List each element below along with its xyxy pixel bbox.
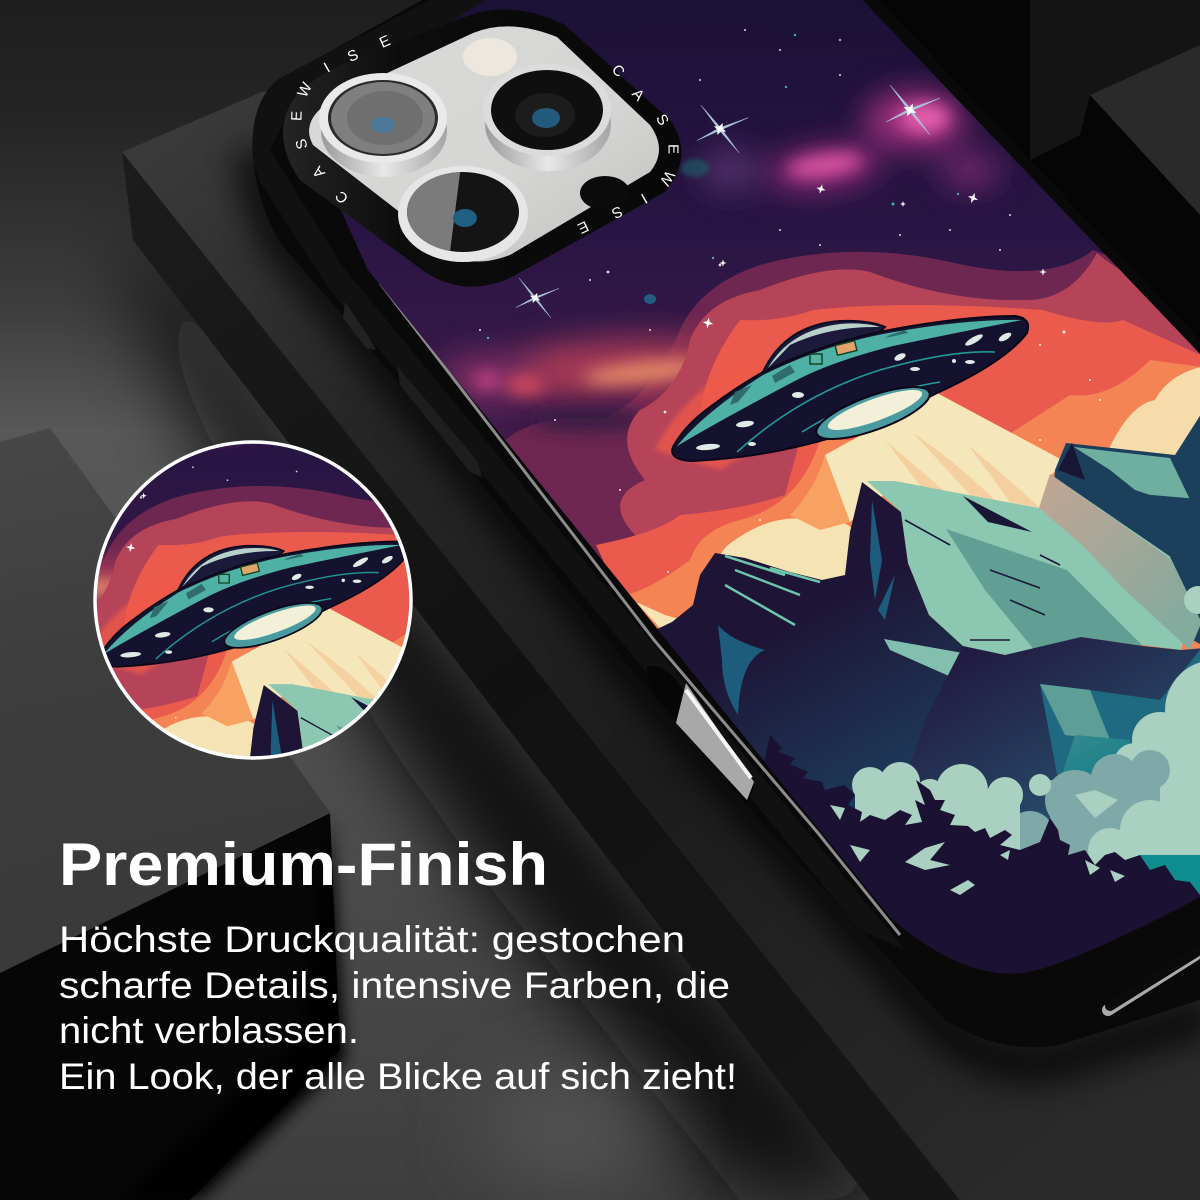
brand ring text: E xyxy=(288,111,306,121)
brand ring text: W xyxy=(294,79,316,100)
top right block top xyxy=(1090,45,1200,215)
lower left block top xyxy=(0,428,330,975)
lower left block dark front xyxy=(0,813,345,1200)
body text: scharfe Details, intensive Farben, die xyxy=(59,965,730,1006)
phone case body xyxy=(253,0,1200,1047)
microphone hole xyxy=(580,176,630,210)
brand ring text: E xyxy=(575,217,591,237)
heading: Premium-Finish xyxy=(59,831,548,898)
brand ring text: C xyxy=(608,61,628,81)
detail magnifier circle xyxy=(93,440,413,760)
lens top left xyxy=(319,73,447,177)
brand ring text: I xyxy=(638,190,650,206)
side button long xyxy=(398,367,482,477)
brand ring text: S xyxy=(609,202,625,222)
brand ring text: I xyxy=(321,60,333,76)
phone shadow on plinth xyxy=(253,150,1200,1064)
phone artwork xyxy=(340,0,1200,974)
top right black backdrop xyxy=(860,0,1200,360)
body text: Höchste Druckqualität: gestochen xyxy=(59,919,685,960)
body text: nicht verblassen. xyxy=(59,1010,359,1051)
brand ring text xyxy=(288,32,682,237)
brand ring text: E xyxy=(377,32,393,52)
side button small xyxy=(343,302,376,350)
glossy edge highlight xyxy=(380,283,900,935)
bottom port xyxy=(1108,951,1198,1010)
body text xyxy=(59,919,737,1097)
brand ring text: C xyxy=(332,187,352,207)
lens bottom xyxy=(398,165,528,262)
lens window xyxy=(309,26,659,261)
main plinth side face xyxy=(122,152,960,1200)
silver side button xyxy=(647,666,754,805)
brand ring text: S xyxy=(345,46,361,66)
case front rim xyxy=(252,0,905,950)
brand ring text: E xyxy=(664,144,682,154)
brand ring text: A xyxy=(628,86,648,104)
camera island xyxy=(283,9,682,287)
plinth shadow on floor xyxy=(135,230,900,1200)
brand ring text: W xyxy=(656,167,678,189)
brand ring text: S xyxy=(292,137,312,151)
lens top right xyxy=(483,64,611,171)
body text: Ein Look, der alle Blicke auf sich zieht! xyxy=(59,1056,737,1097)
floor glow xyxy=(480,1080,660,1180)
brand ring text: A xyxy=(309,163,329,181)
flash xyxy=(463,38,517,76)
top right panel xyxy=(1030,0,1200,160)
brand ring text: S xyxy=(652,111,672,129)
